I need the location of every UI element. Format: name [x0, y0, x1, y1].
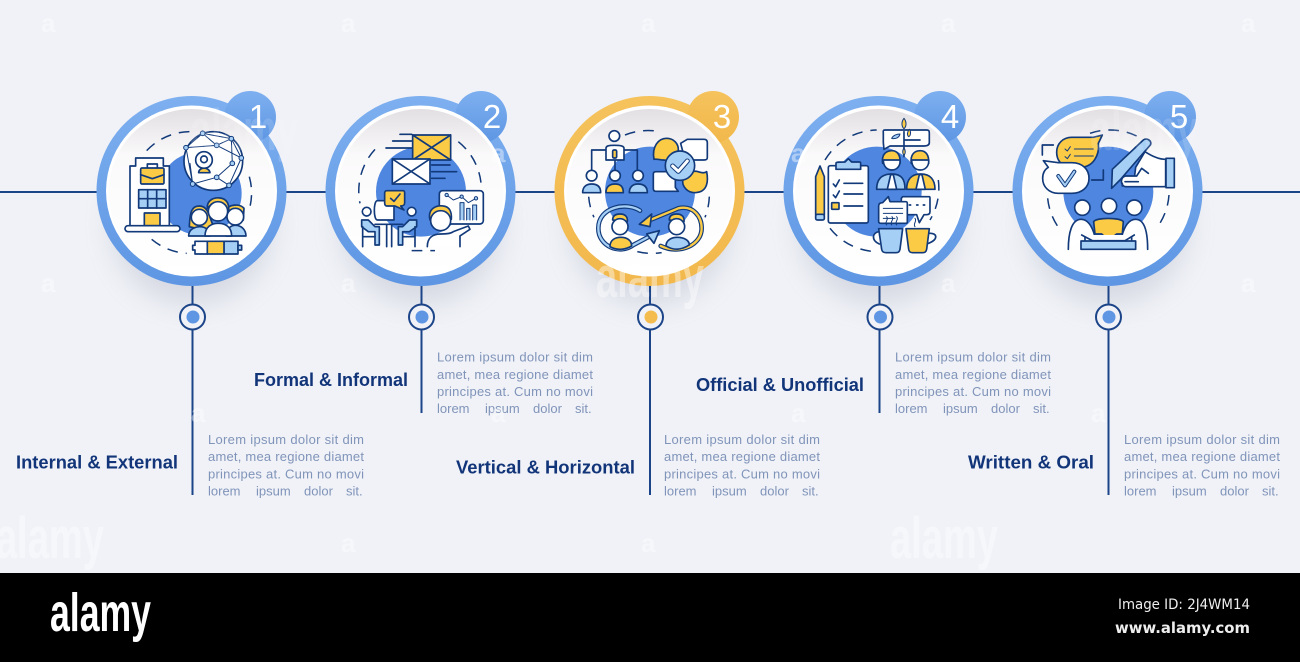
text 4: Lorem ipsum dolor sit dim — [895, 350, 1051, 364]
watermarks: a — [491, 398, 506, 428]
ring 3 — [554, 91, 744, 286]
text 3: lorem — [664, 484, 697, 498]
shadow 5 — [1028, 144, 1188, 304]
text 3: Lorem ipsum dolor sit dim — [664, 432, 820, 447]
node 1 — [180, 304, 205, 330]
step 1 — [16, 91, 364, 498]
step 3 — [456, 91, 820, 498]
text 5: Lorem ipsum dolor sit dim — [1124, 432, 1280, 447]
watermarks: alamy — [890, 506, 998, 571]
watermarks: a — [791, 138, 806, 168]
connector 5 — [1108, 286, 1110, 495]
watermarks: a — [941, 268, 956, 298]
text 4: lorem — [895, 401, 928, 416]
text 3: amet, mea regione diamet — [664, 449, 820, 464]
watermarks: a — [191, 398, 206, 428]
watermarks: a — [41, 268, 56, 298]
text 2: dolor — [533, 401, 563, 416]
shadow 1 — [112, 144, 272, 304]
image id: Image ID: 2J4WM14 — [1118, 597, 1250, 613]
connector 1 — [192, 286, 194, 495]
heading 4: Official & Unofficial — [696, 375, 864, 395]
ring 2 — [326, 91, 516, 286]
shadow 4 — [799, 144, 959, 304]
watermarks: a — [641, 528, 656, 558]
heading 2: Formal & Informal — [254, 370, 408, 390]
text 4: sit. — [1033, 401, 1050, 416]
text 4: amet, mea regione diamet — [895, 367, 1051, 382]
watermarks: a — [941, 8, 956, 38]
text 2 — [437, 350, 593, 416]
text 2: Lorem ipsum dolor sit dim — [437, 350, 593, 364]
ring 5 — [1012, 91, 1202, 286]
heading 5: Written & Oral — [968, 452, 1094, 472]
footer logo: alamy — [50, 583, 151, 643]
text 2: ipsum — [485, 401, 520, 416]
text 1: Lorem ipsum dolor sit dim — [208, 432, 364, 447]
text 5: principes at. Cum no movi — [1124, 466, 1280, 482]
text 5: ipsum — [1172, 484, 1207, 498]
watermarks: a — [41, 8, 56, 38]
heading 3: Vertical & Horizontal — [456, 458, 635, 478]
watermarks: a — [341, 268, 356, 298]
icon: envelopes, meeting and chart — [359, 134, 483, 251]
text 5: dolor — [1220, 484, 1250, 498]
step 5 — [968, 91, 1280, 498]
node 3 — [638, 304, 663, 330]
icon: building, network and team — [125, 131, 252, 254]
text 1: sit. — [346, 484, 363, 498]
text 5: sit. — [1262, 484, 1279, 498]
text 2: lorem — [437, 401, 470, 416]
node 5 — [1096, 304, 1121, 330]
node 2 — [409, 304, 434, 330]
text 2: sit. — [575, 401, 592, 416]
number 4: 4 — [941, 98, 959, 135]
horizontal timeline line — [0, 191, 1300, 193]
text 2: principes at. Cum no movi — [437, 384, 593, 399]
watermarks: alamy — [596, 245, 704, 310]
text 4: ipsum — [943, 401, 978, 416]
icon: checklist, colleagues and coffee — [816, 118, 939, 253]
text 3: ipsum — [712, 484, 747, 498]
footer bar — [0, 573, 1300, 662]
text 1: ipsum — [256, 484, 291, 498]
watermarks: a — [341, 528, 356, 558]
text 2: amet, mea regione diamet — [437, 367, 593, 382]
node 4 — [868, 304, 892, 330]
text 1: lorem — [208, 484, 241, 498]
text 1 — [208, 432, 364, 498]
watermarks: a — [491, 138, 506, 168]
text 1: principes at. Cum no movi — [208, 466, 364, 482]
watermarks: alamy — [0, 506, 104, 571]
ring 4 — [784, 91, 974, 286]
website: www.alamy.com — [1115, 619, 1250, 637]
shadow 3 — [570, 144, 730, 304]
step 2 — [254, 91, 593, 416]
connector 4 — [878, 286, 880, 413]
watermarks: a — [1241, 8, 1256, 38]
text 5: amet, mea regione diamet — [1124, 449, 1280, 464]
text 1: dolor — [304, 484, 334, 498]
text 5: lorem — [1124, 484, 1157, 498]
text 4: principes at. Cum no movi — [895, 384, 1051, 399]
watermarks: a — [791, 398, 806, 428]
watermarks: a — [1241, 268, 1256, 298]
watermarks: alamy — [190, 98, 298, 163]
watermarks: a — [1091, 398, 1106, 428]
watermarks: a — [641, 8, 656, 38]
watermarks: a — [341, 8, 356, 38]
number 3: 3 — [713, 98, 731, 135]
text 3: sit. — [802, 484, 819, 498]
text 4: dolor — [991, 401, 1021, 416]
text 4 — [895, 350, 1051, 416]
number 5: 5 — [1170, 98, 1188, 135]
text 3 — [664, 432, 820, 498]
number 1: 1 — [249, 98, 267, 135]
watermarks: alamy — [1090, 98, 1198, 163]
text 5 — [1124, 432, 1280, 498]
text 3: dolor — [760, 484, 790, 498]
text 1: amet, mea regione diamet — [208, 449, 364, 464]
heading 1: Internal & External — [16, 452, 178, 472]
shadow 2 — [341, 144, 501, 304]
icon: written agreement and oral discussion — [1042, 130, 1174, 249]
number 2: 2 — [483, 98, 501, 135]
connector 2 — [420, 286, 422, 413]
ring 1 — [96, 91, 286, 286]
step 4 — [696, 91, 1051, 416]
icon: hierarchy, chat and exchange loop — [583, 131, 709, 253]
text 3: principes at. Cum no movi — [664, 466, 820, 482]
connector 3 — [649, 286, 651, 495]
